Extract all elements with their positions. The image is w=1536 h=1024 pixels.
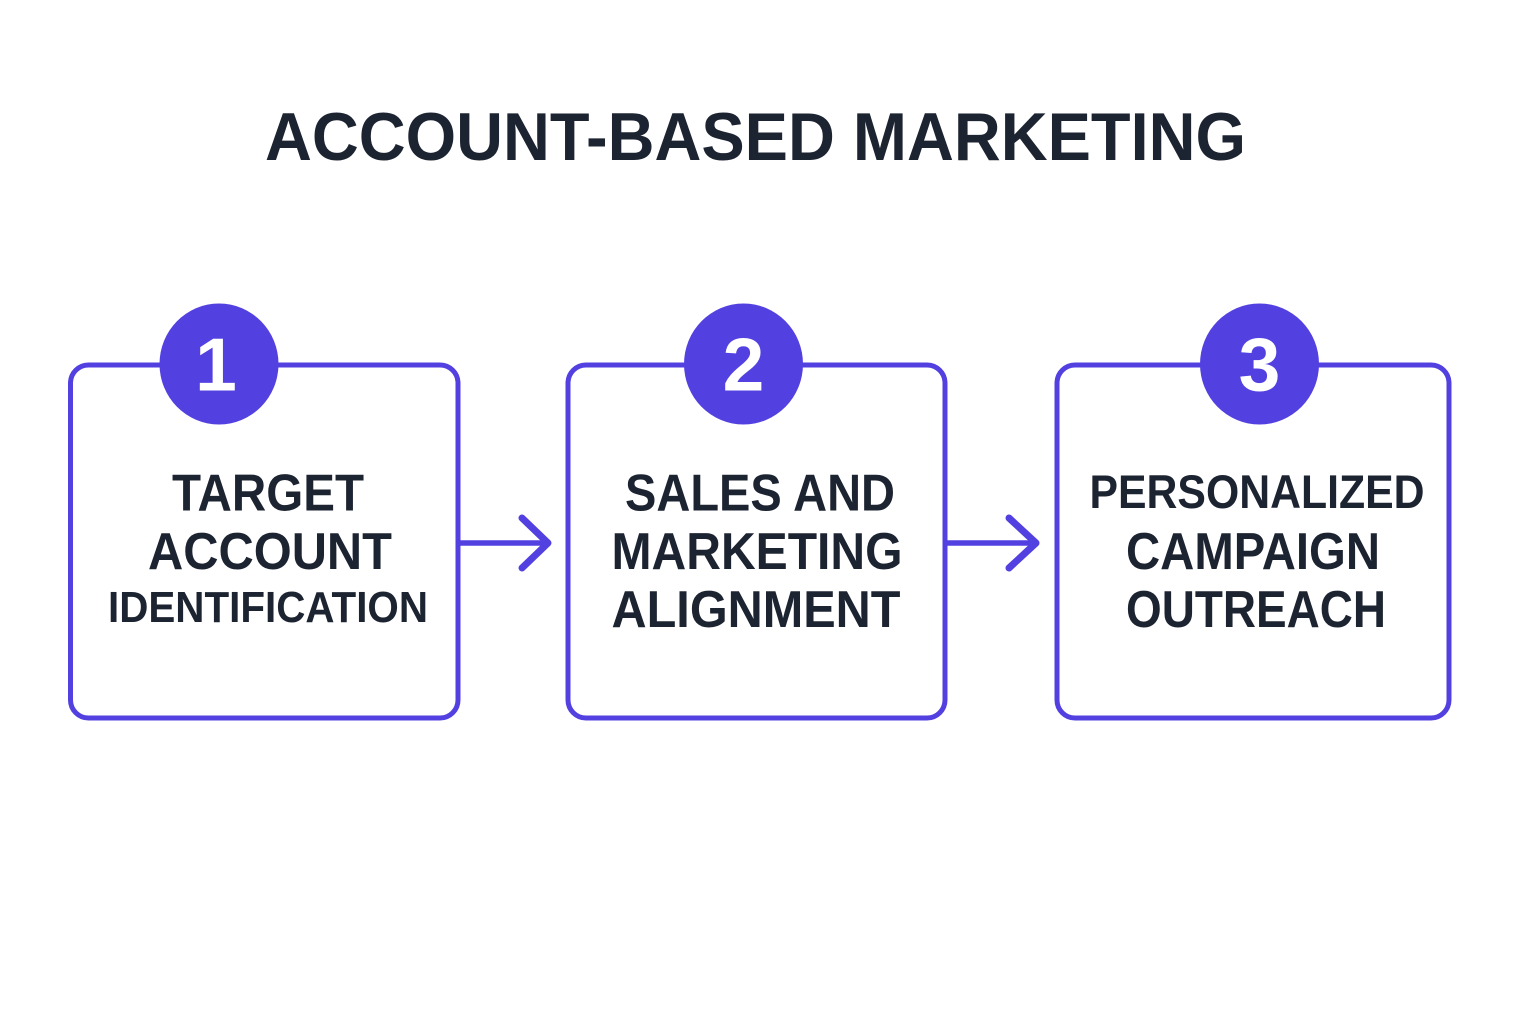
step 3 label [1090,465,1424,639]
step 2 label: MARKETING [612,523,902,581]
step 1 label: TARGET [172,464,364,522]
icon: number 2 badge [684,304,803,424]
icon: number 2 badge: 2 [723,322,764,406]
icon: number 1 badge [160,304,278,424]
step 3 label: PERSONALIZED [1090,465,1424,518]
panel: step 2 [568,304,945,718]
panel: step 1 [70,304,458,718]
step 1 label: ACCOUNT [148,523,392,581]
icon: number 3 badge [1200,304,1319,424]
title: ACCOUNT-BASED MARKETING [265,99,1246,175]
arrow: step 1 to step 2 [460,518,548,568]
step 2 label: ALIGNMENT [612,581,901,639]
step 2 label [612,464,902,639]
step 1 label [108,464,428,632]
step 1 label: IDENTIFICATION [108,583,428,632]
step 2 label: SALES AND [625,464,895,522]
icon: number 1 badge: 1 [195,322,237,406]
step 3 label: CAMPAIGN [1126,523,1380,581]
step 3 label: OUTREACH [1126,581,1386,639]
icon: number 3 badge: 3 [1239,322,1280,406]
panel: step 3 [1057,304,1449,718]
arrow: step 2 to step 3 [947,518,1036,568]
